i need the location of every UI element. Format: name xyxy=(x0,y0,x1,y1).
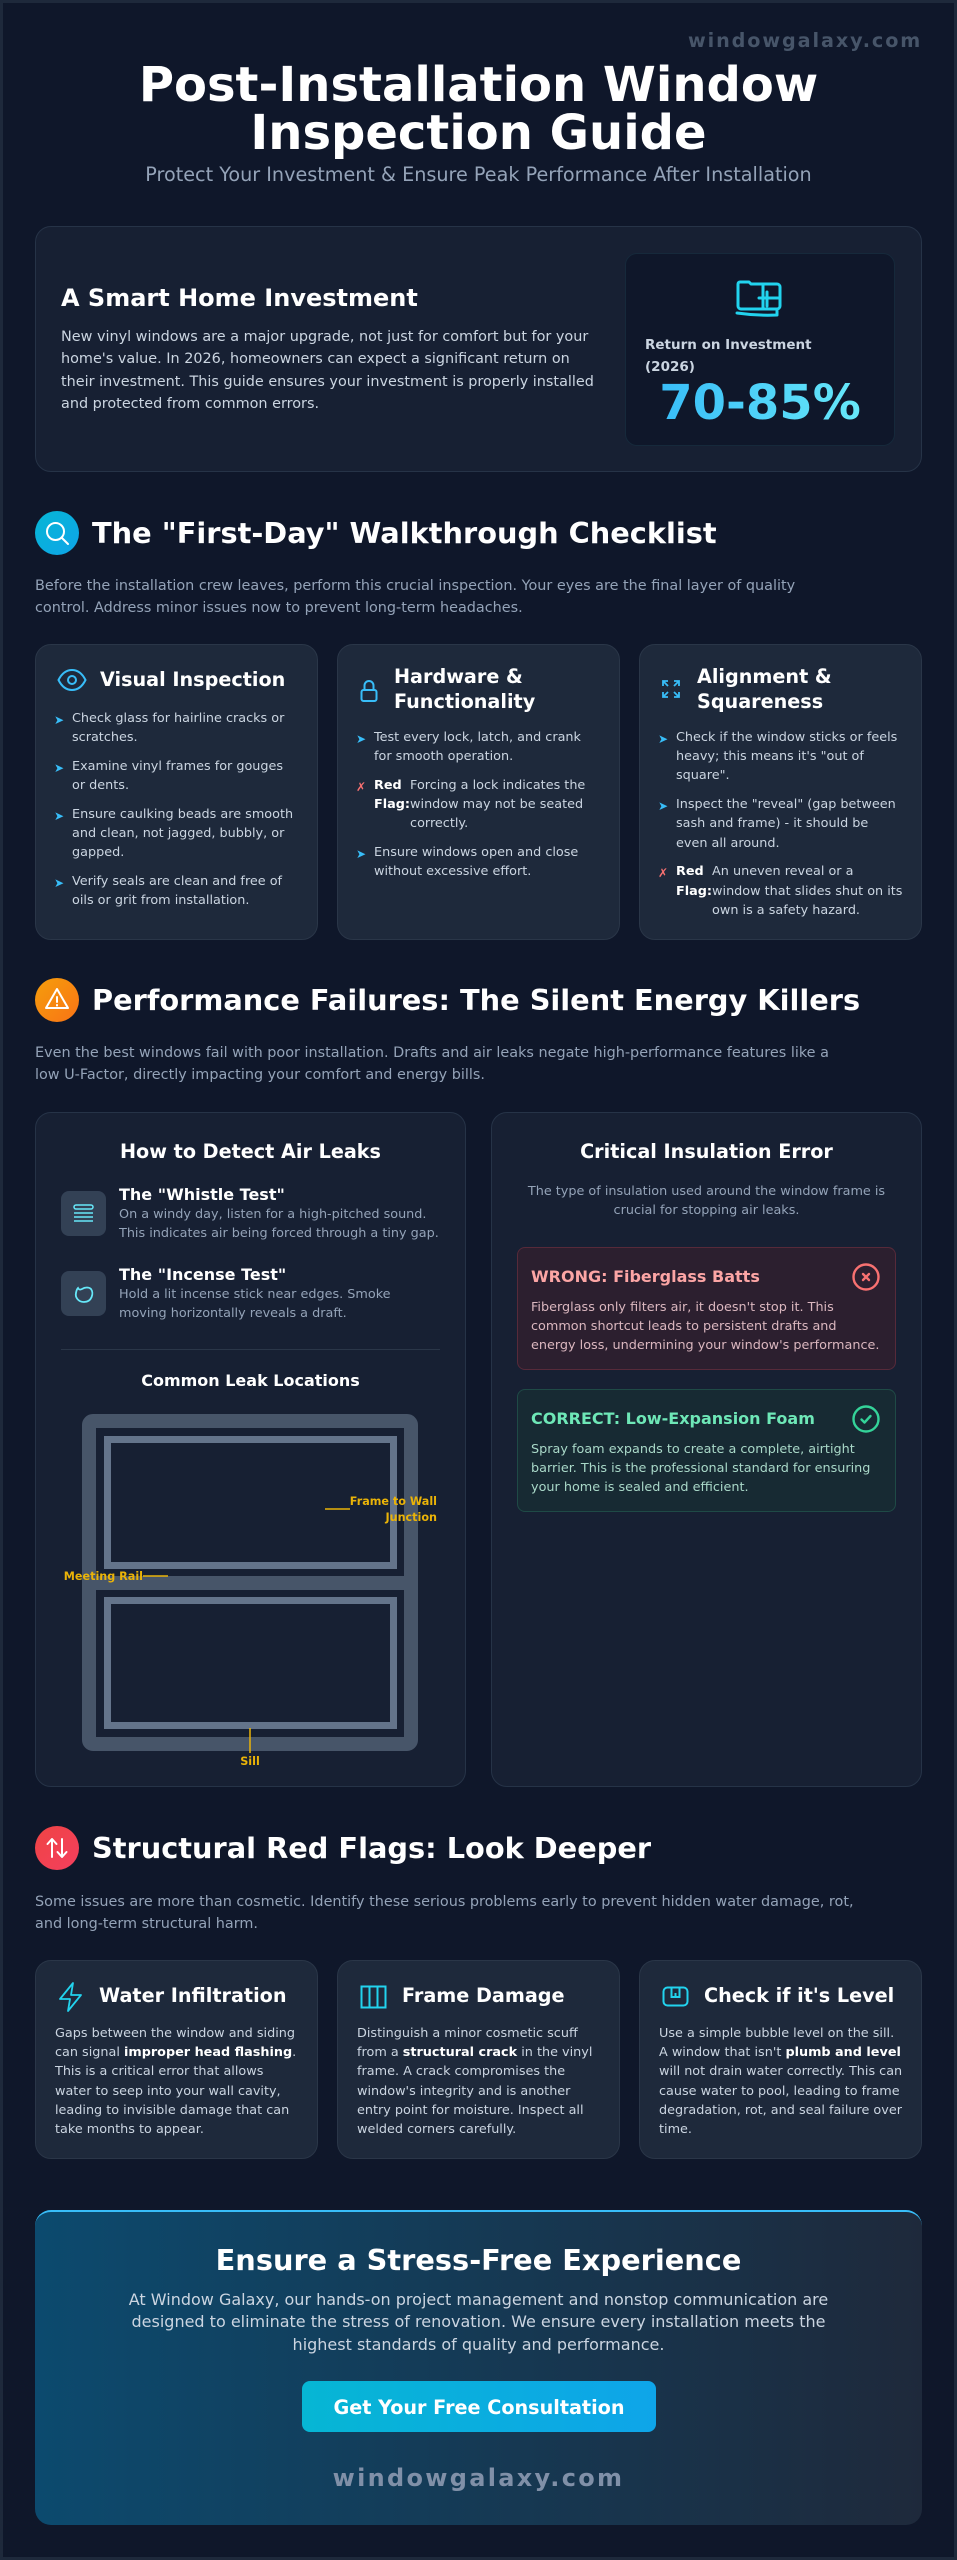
callout: correct low-expansion foam xyxy=(517,1389,896,1512)
icon: lightning bolt xyxy=(59,1982,82,2012)
text: call to action: highest standards of quality and performance. xyxy=(293,2335,664,2354)
section 1 description xyxy=(35,578,795,616)
heading: stress-free experience: Ensure a Stress-Free Experience xyxy=(216,2243,741,2277)
text: incense test xyxy=(119,1265,391,1321)
heading: critical insulation error: Critical Insulation Error xyxy=(580,1140,833,1163)
text: correct xyxy=(531,1442,870,1495)
heading: check if level: Check if it's Level xyxy=(704,1984,894,2007)
section 1 icon: magnifier xyxy=(35,511,79,555)
stat box: return on investment xyxy=(625,253,895,446)
section 3 description: and long-term structural harm. xyxy=(35,1916,258,1932)
text: correct: Spray foam expands to create a complete, airtight xyxy=(531,1442,855,1457)
checklist: hardware: Flag: xyxy=(374,797,410,812)
card: frame damage xyxy=(337,1960,620,2159)
icon: frame columns xyxy=(360,1986,386,2008)
title: whistle test: The "Whistle Test" xyxy=(119,1185,285,1204)
section 1 description: Before the installation crew leaves, perform this crucial inspection. Your eyes are the final layer of quality xyxy=(35,578,795,594)
icon: expand arrows xyxy=(662,680,680,698)
checklist: alignment: square". xyxy=(676,768,730,783)
window outer frame xyxy=(89,1421,411,1744)
text: investment intro: home's value. In 2026, homeowners can expect a significant return on xyxy=(61,351,570,367)
text: whistle test xyxy=(118,1185,439,1241)
text: water infiltration: can signal improper head flashing. xyxy=(55,2045,296,2060)
title: Inspection Guide xyxy=(250,105,707,161)
checklist: hardware: Ensure windows open and close xyxy=(374,845,578,860)
text: investment intro: their investment. This guide ensures your investment is properly installed xyxy=(61,374,594,390)
section 2 heading: Performance Failures: The Silent Energy Killers xyxy=(92,983,860,1017)
section 2 description: low U-Factor, directly impacting your comfort and energy bills. xyxy=(35,1067,485,1083)
card: water infiltration xyxy=(35,1960,318,2159)
checklist: visual: or dents. xyxy=(72,778,129,793)
checklist: hardware: for smooth operation. xyxy=(374,749,513,764)
title: Post-Installation Window xyxy=(139,57,818,113)
checklist: visual: scratches. xyxy=(72,730,138,745)
label: return on investment: Return on Investment xyxy=(645,337,812,353)
text: water infiltration: This is a critical error that allows xyxy=(55,2064,263,2079)
panel: call to action xyxy=(35,2210,922,2525)
checklist: visual: oils or grit from installation. xyxy=(72,893,249,908)
section 1 heading: The "First-Day" Walkthrough Checklist xyxy=(92,516,717,550)
icon: level xyxy=(662,1986,688,2006)
text: call to action: At Window Galaxy, our hands-on project management and nonstop communication are xyxy=(129,2290,828,2309)
section 3 icon: arrows xyxy=(35,1826,79,1870)
text: check if level: Use a simple bubble level on the sill. xyxy=(659,2026,894,2041)
checklist: hardware xyxy=(357,730,585,879)
text: check if level xyxy=(659,2026,902,2137)
checklist: alignment: Check if the window sticks or feels xyxy=(676,730,897,745)
panel: smart home investment xyxy=(35,226,922,472)
callout: frame to wall junction xyxy=(325,1495,437,1524)
section 3 description xyxy=(35,1894,854,1932)
section 2 description xyxy=(35,1044,829,1083)
text: wrong: Fiberglass only filters air, it doesn't stop it. This xyxy=(531,1300,834,1315)
description: incense test: Hold a lit incense stick near edges. Smoke xyxy=(119,1287,391,1302)
title: wrong: WRONG: Fiberglass Batts xyxy=(531,1267,760,1286)
heading: hardware and functionality: Hardware & xyxy=(394,665,523,688)
checklist: alignment xyxy=(659,730,902,918)
heading: alignment and squareness: Alignment & xyxy=(697,665,832,688)
text: correct: barrier. This is the professional standard for ensuring xyxy=(531,1461,870,1476)
heading: visual inspection: Visual Inspection xyxy=(100,668,285,691)
text: wrong: energy loss, undermining your window's performance. xyxy=(531,1338,879,1353)
checklist: hardware: without excessive effort. xyxy=(374,864,531,879)
checklist: hardware: Test every lock, latch, and crank xyxy=(374,730,581,745)
text: water infiltration: leading to invisible damage that can xyxy=(55,2103,289,2118)
description: insulation xyxy=(528,1184,885,1218)
icon: x circle xyxy=(852,1263,880,1291)
checklist: visual: Ensure caulking beads are smooth xyxy=(72,807,293,822)
callout: wrong fiberglass batts xyxy=(517,1247,896,1370)
text: check if level: time. xyxy=(659,2122,692,2137)
text: frame damage: frame. A crack compromises the xyxy=(357,2064,565,2079)
description: whistle test: On a windy day, listen for a high-pitched sound. xyxy=(119,1207,426,1222)
watermark: windowgalaxy.com xyxy=(688,29,922,52)
icon: check circle xyxy=(852,1405,880,1433)
panel: critical insulation error xyxy=(491,1112,922,1787)
text: call to action: designed to eliminate the stress of renovation. We ensure every installation meets the xyxy=(132,2312,825,2331)
text: correct: your home is sealed and efficient. xyxy=(531,1480,749,1495)
text: water infiltration xyxy=(54,2026,296,2137)
callout: frame to wall junction: Frame to Wall xyxy=(350,1495,437,1508)
text: water infiltration: Gaps between the window and siding xyxy=(55,2026,295,2041)
text: water infiltration: water to seep into your wall cavity, xyxy=(55,2084,281,2099)
heading: alignment and squareness xyxy=(697,665,832,713)
description: whistle test: This indicates air being forced through a tiny gap. xyxy=(119,1226,439,1241)
text: check if level: cause water to pool, leading to frame xyxy=(659,2084,900,2099)
checklist: visual: Check glass for hairline cracks or xyxy=(72,711,284,726)
text: water infiltration: take months to appear. xyxy=(55,2122,204,2137)
card: alignment and squareness xyxy=(639,644,922,940)
panel: how to detect air leaks xyxy=(35,1112,466,1787)
heading: hardware and functionality: Functionality xyxy=(394,690,535,713)
callout: meeting rail: Meeting Rail xyxy=(64,1570,143,1583)
checklist: hardware: correctly. xyxy=(410,816,468,831)
checklist: alignment: Inspect the "reveal" (gap between xyxy=(676,797,896,812)
title: correct: CORRECT: Low-Expansion Foam xyxy=(531,1409,815,1428)
window upper sash xyxy=(108,1440,394,1566)
icon: lock xyxy=(360,680,378,702)
checklist: alignment: own is a safety hazard. xyxy=(712,903,860,918)
heading: detect air leaks: How to Detect Air Leaks xyxy=(120,1140,381,1163)
text: frame damage: window's integrity and is another xyxy=(357,2084,570,2099)
text: frame damage xyxy=(357,2026,592,2137)
description: whistle test xyxy=(118,1207,439,1241)
window lower sash xyxy=(108,1600,394,1726)
checklist: alignment: sash and frame) - it should be xyxy=(676,816,868,831)
text: investment intro: and protected from common errors. xyxy=(61,396,319,412)
description: incense test xyxy=(119,1287,391,1321)
icon tile: whistle test xyxy=(61,1191,106,1236)
section 3 heading: Structural Red Flags: Look Deeper xyxy=(92,1831,651,1865)
checklist: alignment: heavy; this means it's "out of xyxy=(676,749,864,764)
section 1 description: control. Address minor issues now to prevent long-term headaches. xyxy=(35,600,523,616)
text: check if level: will not drain water correctly. This can xyxy=(659,2064,902,2079)
checklist: visual xyxy=(55,711,293,908)
description: incense test: moving horizontally reveals a draft. xyxy=(119,1306,347,1321)
website link: windowgalaxy.com xyxy=(333,2464,624,2492)
text: frame damage: from a structural crack in the vinyl xyxy=(357,2045,592,2060)
checklist: alignment: even all around. xyxy=(676,836,780,851)
label: return on investment xyxy=(645,337,812,375)
checklist: visual: Verify seals are clean and free of xyxy=(72,874,282,889)
text: wrong xyxy=(531,1300,879,1353)
text: investment intro xyxy=(61,329,594,412)
heading: smart home investment: A Smart Home Investment xyxy=(61,284,418,312)
heading: common leak locations: Common Leak Locations xyxy=(141,1371,360,1390)
heading: hardware and functionality xyxy=(394,665,535,713)
description: insulation: The type of insulation used around the window frame is xyxy=(528,1184,885,1199)
text: frame damage: Distinguish a minor cosmetic scuff xyxy=(357,2026,578,2041)
card: visual inspection xyxy=(35,644,318,940)
title: incense test: The "Incense Test" xyxy=(119,1265,286,1284)
button: free consultation: Get Your Free Consultation xyxy=(333,2396,625,2419)
icon: eye xyxy=(57,669,87,691)
icon tile: incense test xyxy=(61,1271,106,1316)
subtitle: Protect Your Investment & Ensure Peak Performance After Installation xyxy=(145,163,812,186)
icon: money xyxy=(736,280,782,317)
heading: alignment and squareness: Squareness xyxy=(697,690,823,713)
text: investment intro: New vinyl windows are a major upgrade, not just for comfort but for your xyxy=(61,329,588,345)
title xyxy=(139,57,818,161)
label: return on investment: (2026) xyxy=(645,359,695,375)
card: check if level xyxy=(639,1960,922,2159)
text: frame damage: entry point for moisture. Inspect all xyxy=(357,2103,584,2118)
heading: frame damage: Frame Damage xyxy=(402,1984,565,2007)
checklist: alignment: Red xyxy=(676,864,704,879)
checklist: alignment: Flag: xyxy=(676,884,712,899)
text: check if level: degradation, rot, and seal failure over xyxy=(659,2103,902,2118)
callout: frame to wall junction: Junction xyxy=(384,1511,437,1524)
checklist: visual: Examine vinyl frames for gouges xyxy=(72,759,283,774)
section 3 description: Some issues are more than cosmetic. Identify these serious problems early to prevent hidden water damage, rot, xyxy=(35,1894,854,1910)
heading: water infiltration: Water Infiltration xyxy=(99,1984,287,2007)
text: wrong: common shortcut leads to persistent drafts and xyxy=(531,1319,837,1334)
checklist: visual: gapped. xyxy=(72,845,124,860)
text: call to action xyxy=(128,2290,828,2354)
checklist: hardware: Red xyxy=(374,778,402,793)
diagram: window leak locations xyxy=(64,1414,437,1768)
checklist: visual: and clean, not jagged, bubbly, or xyxy=(72,826,284,841)
text: check if level: A window that isn't plumb and level xyxy=(659,2045,901,2060)
checklist: alignment: window that slides shut on its xyxy=(712,884,902,899)
callout: sill xyxy=(240,1728,260,1768)
checklist: hardware: Forcing a lock indicates the xyxy=(410,778,585,793)
button: free consultation xyxy=(302,2381,656,2432)
section 2 icon: warning xyxy=(35,978,79,1022)
stat: 70-85%: 70-85% xyxy=(659,375,861,431)
checklist: hardware: window may not be seated xyxy=(410,797,583,812)
section 2 description: Even the best windows fail with poor installation. Drafts and air leaks negate high-performance features like a xyxy=(35,1044,829,1060)
card: hardware and functionality xyxy=(337,644,620,940)
text: frame damage: welded corners carefully. xyxy=(357,2122,516,2137)
callout: sill: Sill xyxy=(240,1755,260,1768)
checklist: alignment: An uneven reveal or a xyxy=(712,864,853,879)
description: insulation: crucial for stopping air leaks. xyxy=(614,1203,799,1218)
